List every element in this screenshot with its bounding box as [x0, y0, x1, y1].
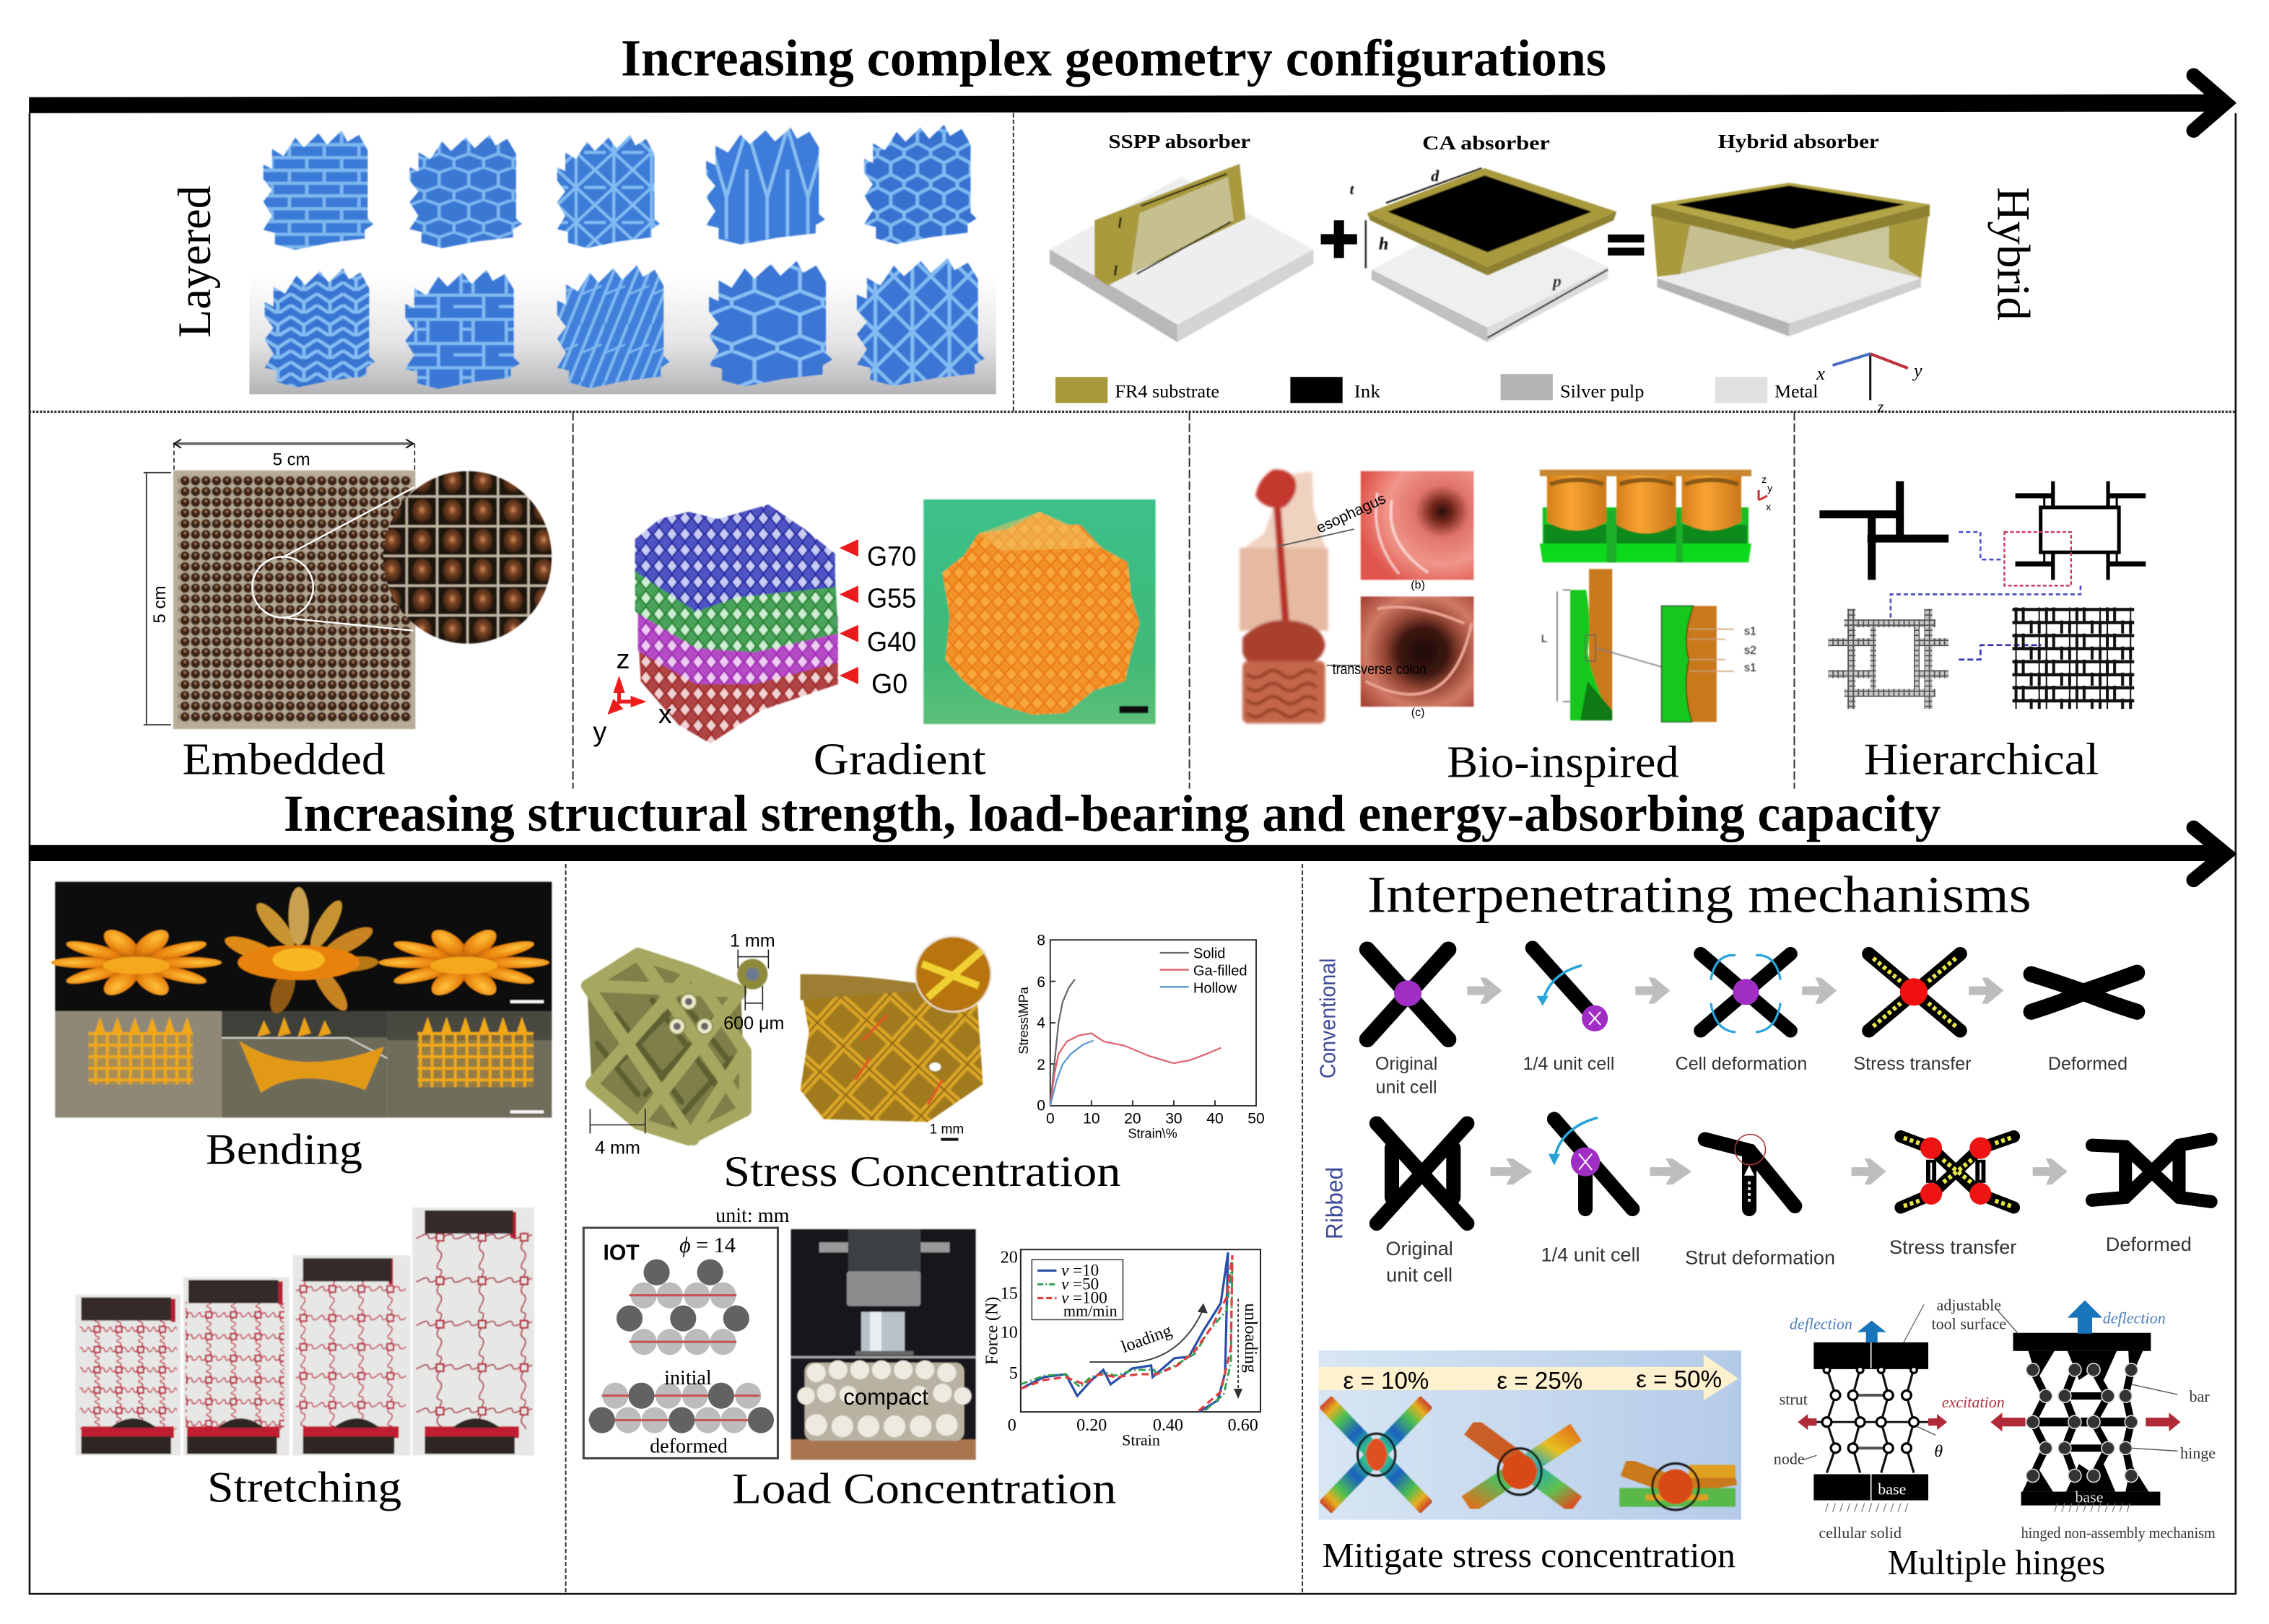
force-strain chart — [983, 1248, 1260, 1449]
stress-strain chart: 0 — [1046, 1110, 1055, 1127]
FEA X at 50% — [1619, 1464, 1735, 1510]
stress-strain chart: Ga-filled — [1193, 964, 1247, 979]
process arrow — [1491, 1158, 1532, 1184]
unit shape 4: woven lattice — [2013, 608, 2134, 709]
image background: honeycomb blocks — [249, 276, 996, 394]
ribbed: strut deformation — [1705, 1135, 1795, 1209]
conventional: stress transfer — [1869, 954, 1960, 1031]
strain labels — [1343, 1366, 1722, 1394]
axes — [1759, 473, 1772, 512]
caption: Embedded: Embedded — [183, 735, 386, 784]
stress-strain chart: 8 — [1037, 932, 1045, 948]
ribbed: deformed — [2092, 1140, 2211, 1202]
process arrow — [1852, 1158, 1886, 1184]
bio-inspired structure 3D — [1540, 470, 1751, 562]
strain labels: ε = 50% — [1636, 1366, 1722, 1393]
dimension marks 5 cm: 5 cm — [150, 585, 170, 624]
panel: bending — [51, 882, 552, 1174]
arrow: structural strength — [29, 828, 2226, 880]
image: embedded sphere array — [173, 471, 415, 729]
hinge annotations: θ — [1934, 1442, 1943, 1461]
ribbed step labels — [1385, 1233, 2192, 1285]
panel: stretching — [75, 1208, 534, 1512]
hinge annotations: strut — [1780, 1390, 1808, 1408]
process arrow — [1802, 977, 1837, 1004]
stress-strain chart — [1016, 932, 1265, 1141]
gradient level labels: G40 — [867, 627, 916, 658]
plus sign — [1321, 220, 1357, 258]
absorber captions: Hybrid absorber — [1718, 131, 1879, 152]
title: increasing structural strength: Increasing structural strength, load-bearing and energy-absorbing capacity — [284, 785, 1941, 842]
dimension marks 5 cm — [144, 440, 414, 725]
unit shape 1 — [1819, 481, 1948, 580]
SSPP absorber diagram: l — [1118, 215, 1122, 231]
ribbed step labels: Original — [1385, 1237, 1453, 1260]
highlight connectors — [1891, 532, 2081, 660]
cellular solid hinge diagram — [1798, 1305, 1947, 1512]
force-strain chart: 10 — [1001, 1324, 1018, 1343]
force-strain chart: Strain — [1122, 1431, 1160, 1449]
SSPP absorber diagram: l — [1113, 263, 1118, 279]
ribbed step labels: Strut deformation — [1685, 1246, 1835, 1268]
conventional step labels: 1/4 unit cell — [1523, 1054, 1614, 1074]
anatomy labels: (c) — [1411, 706, 1424, 719]
conventional step labels: unit cell — [1376, 1077, 1437, 1097]
gradient level labels — [840, 539, 916, 699]
force-strain chart: 0.40 — [1153, 1416, 1183, 1435]
force-strain chart: v =10 — [1061, 1260, 1099, 1279]
graded lattice layers — [635, 505, 838, 743]
caption: Multiple hinges: Multiple hinges — [1888, 1544, 2105, 1582]
conventional step labels: Original — [1375, 1054, 1437, 1074]
force-strain chart: Force (N) — [983, 1297, 1002, 1365]
axes: x y z: z — [1877, 397, 1884, 415]
equals sign — [1608, 238, 1644, 251]
axes: x y z: x — [1816, 363, 1825, 384]
ribbed step labels: unit cell — [1386, 1263, 1453, 1285]
SSPP absorber diagram — [1050, 164, 1314, 342]
legend: materials — [1055, 374, 1818, 403]
process arrow — [1635, 977, 1671, 1004]
row label: Ribbed: Ribbed — [1322, 1167, 1348, 1239]
hinge annotations: bar — [2189, 1387, 2210, 1405]
ribbed step labels: 1/4 unit cell — [1541, 1243, 1640, 1265]
conventional step labels: Stress transfer — [1853, 1054, 1972, 1074]
strain labels: ε = 10% — [1343, 1368, 1429, 1394]
hinge annotations: deflection — [2103, 1309, 2166, 1327]
IOT packing diagram: ϕ = 14 — [679, 1233, 736, 1257]
mitigate stress concentration panel — [1319, 1350, 1741, 1520]
hinge annotations — [1774, 1296, 2216, 1542]
panel: load concentration — [583, 1205, 1260, 1514]
lattice dimensions: 4 mm — [595, 1138, 640, 1158]
esophagus and colon views — [1361, 471, 1473, 707]
legend: materials: FR4 substrate — [1115, 382, 1219, 401]
force-strain chart: v =100 — [1061, 1288, 1107, 1307]
force-strain chart: v =50 — [1061, 1274, 1099, 1293]
lattice dimensions — [590, 930, 784, 1158]
unit label: unit: mm — [715, 1205, 790, 1227]
stress-strain chart: Stress\MPa — [1016, 986, 1031, 1055]
IOT packing diagram: initial — [664, 1367, 712, 1389]
conventional step labels: Cell deformation — [1676, 1054, 1807, 1074]
conventional: deformed — [2031, 973, 2137, 1012]
gradient level labels: G70 — [867, 541, 916, 572]
axes: x — [1766, 501, 1771, 512]
cellular solid hinge diagram: base — [1878, 1480, 1907, 1498]
caption: Bio-inspired: Bio-inspired — [1447, 738, 1679, 787]
heading: Hybrid: Hybrid — [1987, 187, 2039, 320]
CA absorber diagram — [1350, 167, 1616, 342]
interface detail: s1 — [1744, 661, 1756, 674]
panel: embedded — [144, 440, 552, 784]
strain band arrow — [1319, 1355, 1738, 1400]
conventional step labels — [1375, 1054, 2128, 1097]
panel: hybrid — [1050, 131, 2039, 415]
caption: Stress Concentration: Stress Concentration — [723, 1148, 1120, 1196]
stress-strain chart: 0 — [1037, 1097, 1045, 1114]
hinge annotations: hinge — [2180, 1444, 2216, 1462]
stress-strain chart: 4 — [1037, 1015, 1045, 1031]
scale bar: 1 mm — [930, 1122, 964, 1138]
legend: materials: Metal — [1774, 382, 1818, 401]
panel: gradient — [593, 499, 1156, 784]
CA absorber diagram: t — [1350, 182, 1355, 198]
stress-strain chart: 10 — [1083, 1110, 1100, 1127]
caption: Bending: Bending — [206, 1126, 362, 1174]
caption: Gradient: Gradient — [814, 735, 986, 784]
panel: interpenetrating mechanisms — [1317, 865, 2216, 1582]
panel: bio-inspired — [1240, 469, 1772, 787]
process arrow — [1467, 977, 1502, 1004]
process arrow — [1969, 977, 2003, 1004]
interface strip — [1541, 569, 1662, 720]
stress-strain chart: 50 — [1247, 1110, 1265, 1127]
magnifier inset — [383, 471, 552, 644]
hinge annotations: hinged non-assembly mechanism — [2021, 1524, 2216, 1542]
IOT packing diagram: IOT — [603, 1241, 640, 1265]
legend: materials: Silver pulp — [1560, 382, 1644, 401]
axes: x y z — [1816, 354, 1922, 415]
stress-strain chart: 30 — [1165, 1110, 1183, 1127]
hinge annotations: tool surface — [1931, 1315, 2006, 1333]
axes xyz: y — [593, 716, 606, 747]
force-strain chart: 0 — [1008, 1416, 1016, 1435]
absorber captions — [1108, 131, 1879, 154]
gradient level labels: G55 — [867, 583, 916, 614]
photo: gold lattice — [801, 936, 990, 1122]
force-strain chart: 0.20 — [1076, 1416, 1107, 1435]
stress-strain chart: Solid — [1193, 946, 1225, 962]
stress-strain chart: 2 — [1037, 1057, 1045, 1073]
hinge annotations: adjustable — [1937, 1296, 2001, 1314]
conventional: original unit cell — [1367, 949, 1448, 1039]
force-strain chart: unloading — [1241, 1304, 1260, 1373]
absorber captions: SSPP absorber — [1108, 131, 1250, 152]
strain labels: ε = 25% — [1497, 1368, 1582, 1394]
interface detail: s2 — [1744, 644, 1756, 657]
blue lattice blocks — [264, 125, 985, 389]
gradient level labels: G0 — [871, 668, 907, 699]
caption: Mitigate stress concentration: Mitigate stress concentration — [1323, 1537, 1735, 1575]
anatomy labels — [1277, 490, 1427, 719]
force-strain chart: loading — [1119, 1322, 1175, 1357]
compact label: compact — [843, 1384, 928, 1410]
conventional: cell deformation — [1701, 954, 1790, 1032]
zoom lines — [252, 487, 414, 631]
conventional step labels: Deformed — [2048, 1054, 2128, 1074]
force-strain chart: 0.60 — [1228, 1416, 1258, 1435]
axes: x y z: y — [1912, 360, 1922, 381]
heading: Layered: Layered — [169, 185, 220, 338]
ribbed: stress transfer — [1901, 1137, 2014, 1208]
absorber captions: CA absorber — [1422, 132, 1550, 154]
hinge annotations: excitation — [1942, 1393, 2005, 1411]
panel: layered — [169, 125, 996, 394]
legend: materials: Ink — [1354, 382, 1380, 401]
panel: stress concentration — [587, 930, 1265, 1196]
hinge annotations: deflection — [1790, 1315, 1852, 1333]
lattice dimensions: 600 μm — [723, 1013, 784, 1034]
ribbed: quarter unit cell — [1549, 1117, 1632, 1209]
ribbed step labels: Stress transfer — [1889, 1236, 2016, 1258]
anatomy illustration — [1240, 469, 1328, 723]
force-strain chart: 5 — [1009, 1364, 1018, 1383]
anatomy labels: esophagus — [1314, 490, 1388, 537]
caption: Hierarchical: Hierarchical — [1864, 735, 2099, 784]
anatomy labels: (b) — [1411, 578, 1425, 591]
interface detail: s1 — [1744, 625, 1756, 638]
stress-strain chart: 20 — [1124, 1110, 1141, 1127]
stress-strain chart: 6 — [1037, 974, 1045, 991]
force-strain chart: 20 — [1001, 1248, 1018, 1267]
lattice dimensions: 1 mm — [730, 930, 775, 951]
hybrid absorber diagram — [1651, 183, 1930, 336]
IOT packing diagram: deformed — [650, 1435, 728, 1457]
photo: printed orange lattice — [923, 499, 1156, 724]
hinge annotations: cellular solid — [1819, 1524, 1902, 1542]
stress-strain chart: 40 — [1206, 1110, 1224, 1127]
CA absorber diagram: p — [1551, 273, 1562, 292]
hinged mechanism diagram — [1990, 1300, 2180, 1512]
axes xyz — [593, 644, 672, 747]
caption: Load Concentration: Load Concentration — [732, 1465, 1116, 1514]
caption: Stretching: Stretching — [207, 1464, 401, 1512]
stress-strain chart: Strain\% — [1128, 1127, 1177, 1141]
force-strain chart: 15 — [1001, 1284, 1018, 1303]
axes xyz: z — [617, 644, 630, 675]
interface detail — [1662, 606, 1756, 722]
IOT packing diagram — [583, 1228, 778, 1458]
unit shape 3: refined strut — [1828, 609, 1948, 709]
stress-strain chart: Hollow — [1193, 981, 1237, 997]
axes: y — [1767, 482, 1772, 494]
hinged mechanism diagram: base — [2075, 1488, 2104, 1506]
photo: compression test pearls — [791, 1229, 976, 1459]
hinge annotations: node — [1774, 1449, 1805, 1467]
axes: z — [1761, 473, 1767, 485]
panel: hierarchical — [1819, 481, 2146, 784]
dimension marks 5 cm: 5 cm — [273, 450, 310, 470]
ribbed step labels: Deformed — [2106, 1233, 2192, 1255]
title: increasing complex geometry configurations: Increasing complex geometry configurations — [621, 29, 1606, 87]
force-strain chart: mm/min — [1063, 1302, 1118, 1320]
anatomy labels: transverse colon — [1333, 661, 1427, 678]
interface strip: L — [1541, 633, 1547, 645]
FEA X at 10% — [1325, 1402, 1427, 1508]
row label: Conventional: Conventional — [1317, 959, 1341, 1078]
axes xyz: x — [658, 699, 672, 730]
conventional: quarter unit cell — [1533, 948, 1608, 1031]
CA absorber diagram: h — [1379, 235, 1388, 253]
arrow: geometry complexity — [29, 75, 2226, 131]
heading: Interpenetrating mechanisms: Interpenetrating mechanisms — [1367, 865, 2031, 923]
FEA X at 25% — [1467, 1426, 1576, 1505]
olive lattice model — [587, 954, 767, 1140]
photo strip: bending flowers and lattices — [51, 882, 552, 1117]
process arrow — [1650, 1158, 1691, 1184]
ribbed: original unit cell — [1377, 1123, 1467, 1223]
stretch frames — [75, 1208, 534, 1455]
CA absorber diagram: d — [1431, 167, 1440, 185]
process arrow — [2033, 1158, 2068, 1184]
unit shape 2 — [2016, 481, 2146, 580]
